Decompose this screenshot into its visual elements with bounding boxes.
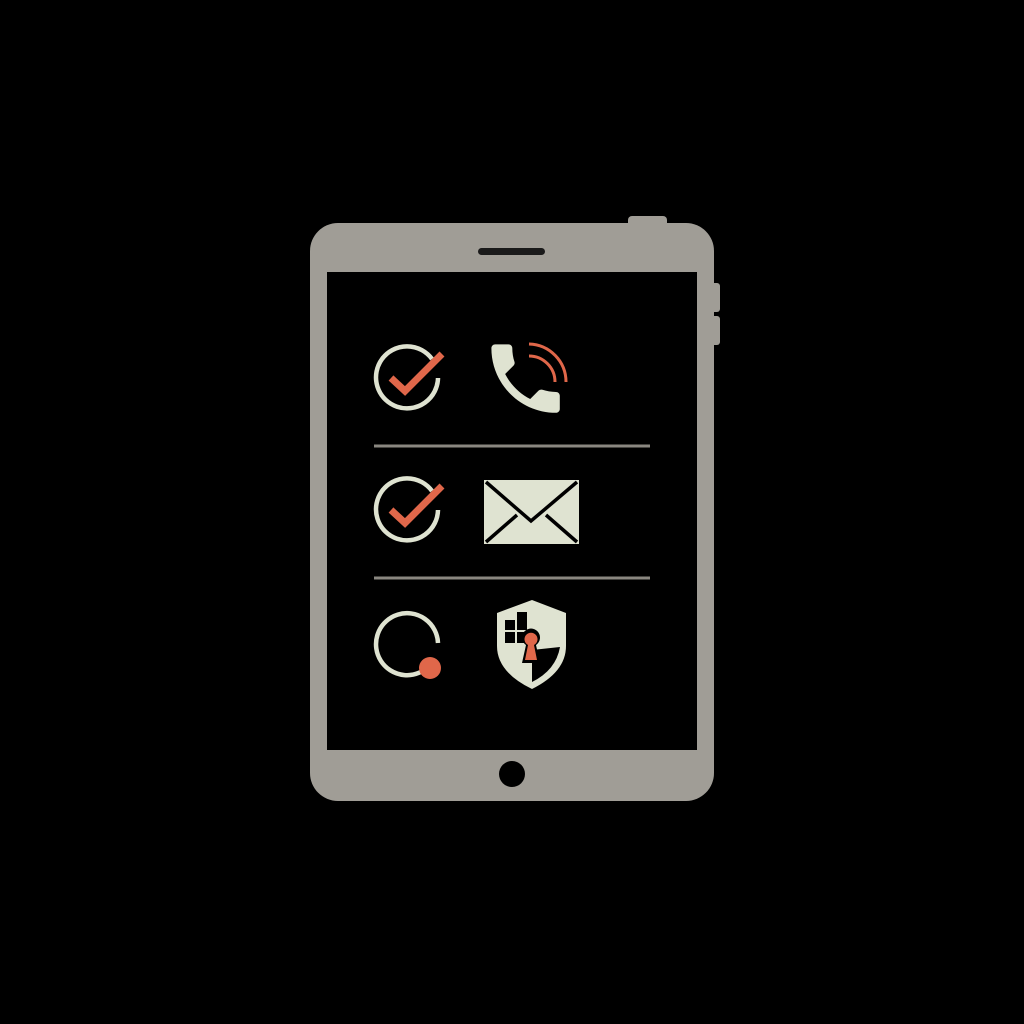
icon: security shield with keyhole [497, 600, 566, 689]
icon: check circle 2 [376, 478, 442, 540]
icon: check circle 1 [376, 346, 442, 408]
icon: phone with signal [491, 344, 566, 413]
icon: loading circle [376, 613, 441, 679]
dividers [374, 444, 650, 448]
icon: envelope [484, 480, 579, 544]
tablet body [310, 216, 720, 801]
